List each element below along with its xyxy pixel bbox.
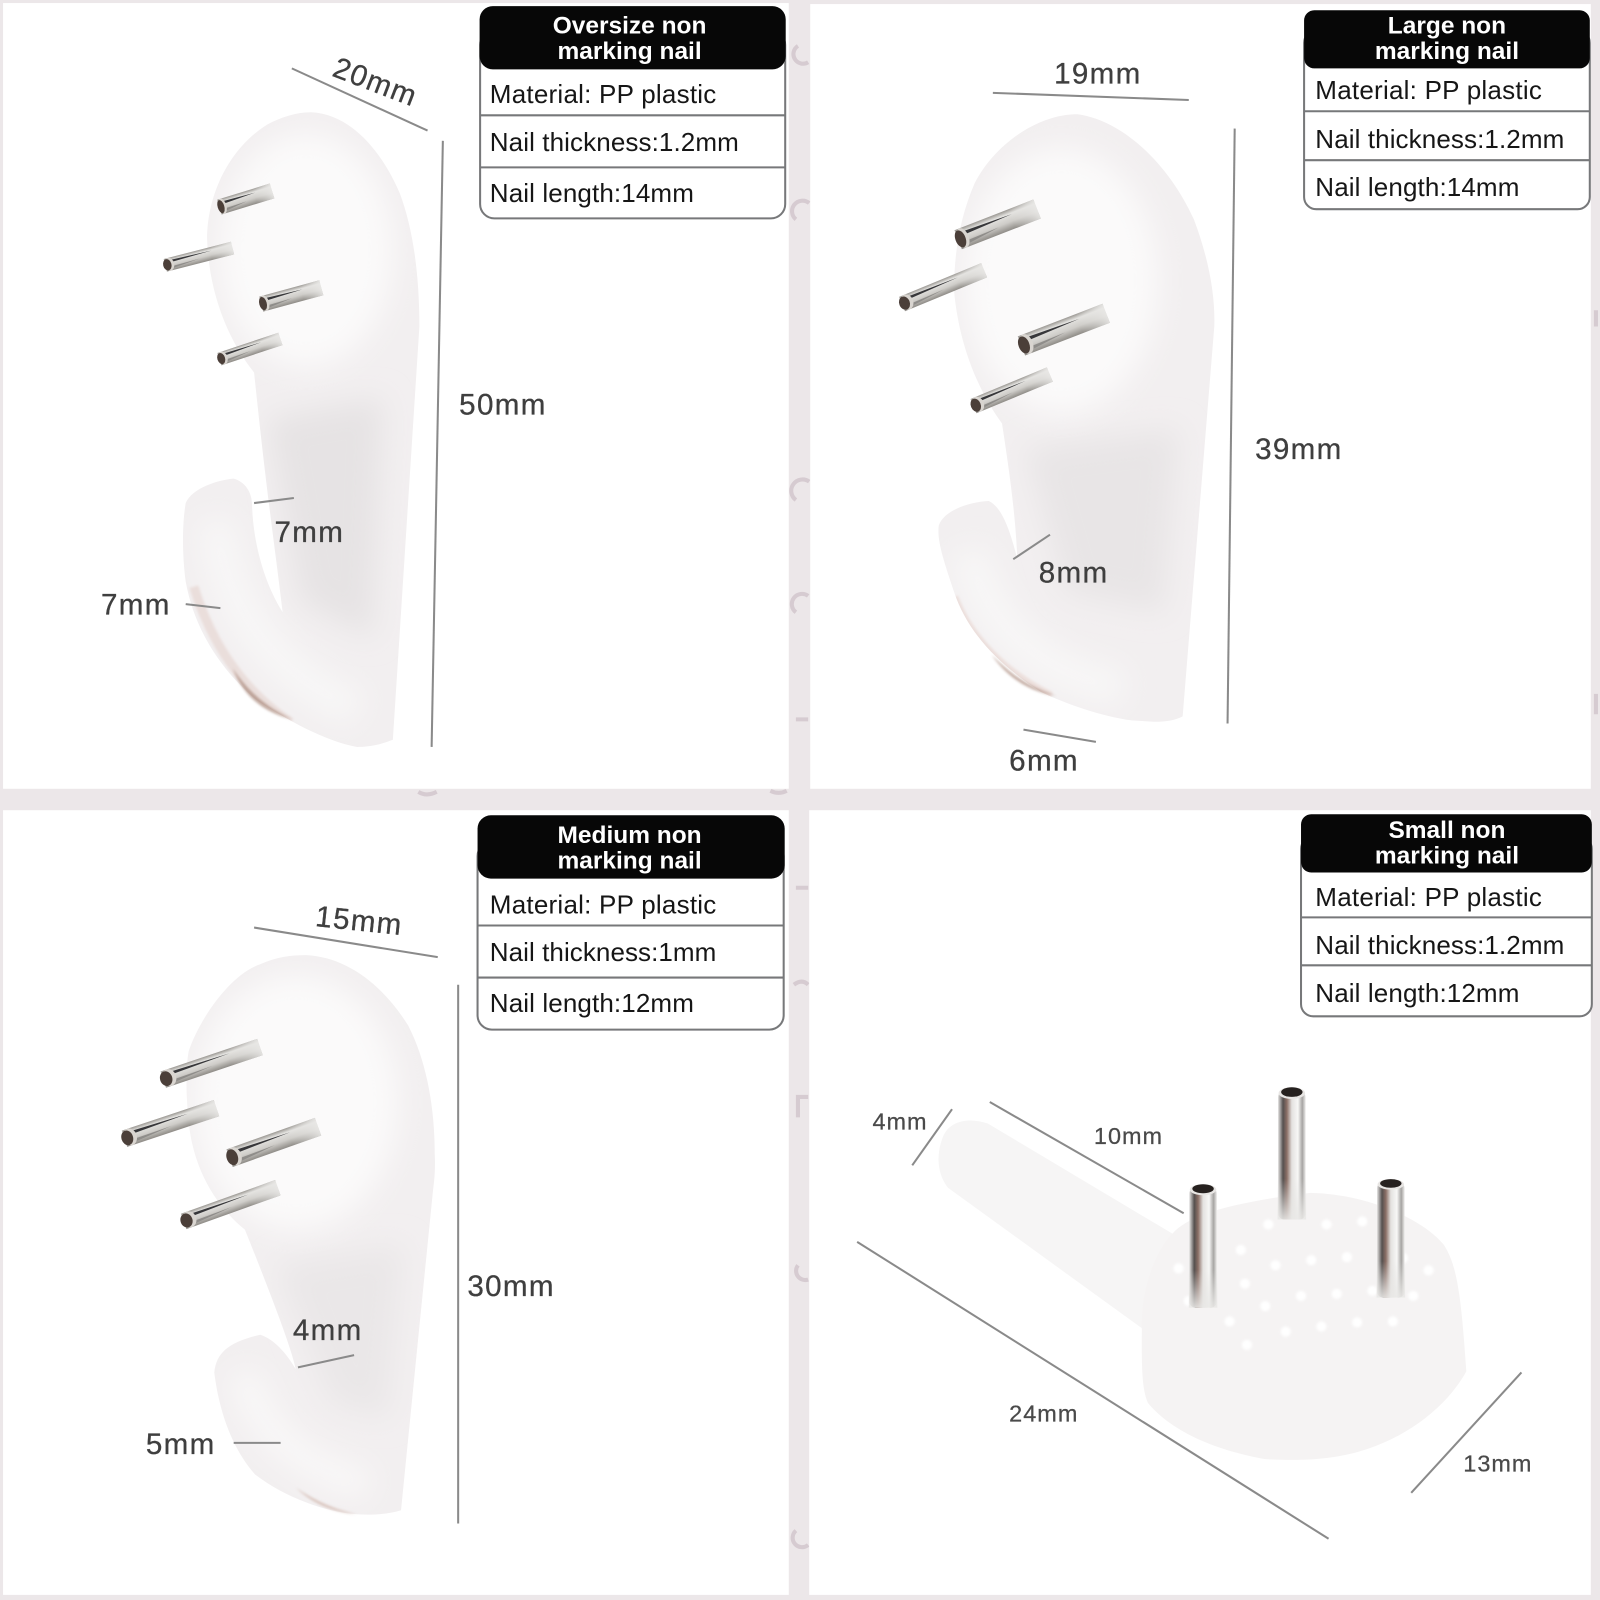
dimension: 19mm: 19mm <box>1054 58 1142 91</box>
dimension: 15mm <box>254 900 438 957</box>
spec table: small: Nail thickness:1.2mm <box>1315 930 1564 960</box>
spec table: small <box>1301 814 1592 1016</box>
large hook <box>897 114 1214 722</box>
dimension: 50mm: 50mm <box>459 388 547 421</box>
dimension: 13mm: 13mm <box>1463 1450 1533 1476</box>
spec table: small: Nail length:12mm <box>1315 978 1519 1008</box>
dimension: 24mm: 24mm <box>1009 1400 1078 1426</box>
dimension: 7mm lower: 7mm <box>101 588 171 621</box>
oversize hook <box>162 112 419 747</box>
dimension: 19mm <box>993 58 1189 100</box>
dimension: 13mm <box>1411 1372 1533 1493</box>
spec table: medium: Nail length:12mm <box>490 988 694 1018</box>
dimension: 10mm: 10mm <box>1094 1123 1163 1149</box>
dimension: 50mm <box>432 141 547 747</box>
spec table: small: Material: PP plastic <box>1315 882 1542 912</box>
spec table: medium <box>478 815 785 1030</box>
small hook <box>939 1087 1466 1460</box>
dimension: 39mm <box>1228 129 1343 723</box>
spec table: large: Nail thickness:1.2mm <box>1315 124 1564 154</box>
spec table: oversize: marking nail <box>558 38 702 65</box>
dimension: 7mm upper: 7mm <box>274 516 344 549</box>
dimension: 4mm: 4mm <box>293 1314 363 1347</box>
dimension: 10mm <box>990 1102 1184 1213</box>
spec table: medium: marking nail <box>558 847 702 874</box>
spec table: large: Large non <box>1388 13 1506 40</box>
dimension: 8mm: 8mm <box>1039 557 1108 590</box>
spec table: oversize <box>480 6 786 218</box>
spec table: oversize: Nail thickness:1.2mm <box>490 127 739 157</box>
dimension: 20mm <box>292 51 428 131</box>
spec table: large: Material: PP plastic <box>1315 75 1542 105</box>
spec table: oversize: Material: PP plastic <box>490 79 716 109</box>
panel: large nail <box>810 4 1591 789</box>
panel: small nail <box>809 810 1592 1595</box>
dimension: 20mm: 20mm <box>329 51 422 113</box>
spec table: large: marking nail <box>1375 38 1519 65</box>
dimension: 5mm <box>146 1428 281 1461</box>
dimension: 7mm upper <box>254 498 344 549</box>
dimension: 8mm <box>1013 535 1108 590</box>
spec table: large: Nail length:14mm <box>1315 172 1519 202</box>
panel: oversize nail <box>3 3 789 789</box>
spec table: oversize: Oversize non <box>553 13 706 40</box>
dimension: 15mm: 15mm <box>314 900 404 942</box>
dimension: 24mm <box>857 1242 1329 1539</box>
dot texture <box>1173 1216 1434 1350</box>
spec table: medium: Nail thickness:1mm <box>490 937 716 967</box>
spec table: small: marking nail <box>1375 842 1519 869</box>
panel: medium nail <box>3 810 789 1595</box>
medium hook <box>119 955 435 1515</box>
dimension: 6mm: 6mm <box>1009 744 1079 777</box>
spec table: medium: Medium non <box>558 822 702 849</box>
dimension: 7mm lower <box>101 588 220 621</box>
spec table: small: Small non <box>1388 817 1505 844</box>
dimension: 6mm <box>1009 730 1096 777</box>
spec table: medium: Material: PP plastic <box>490 889 716 919</box>
dimension: 39mm: 39mm <box>1255 433 1343 466</box>
spec table: oversize: Nail length:14mm <box>490 178 694 208</box>
dimension: 4mm <box>872 1109 952 1165</box>
dimension: 5mm: 5mm <box>146 1428 216 1461</box>
spec table: large <box>1304 10 1590 209</box>
dimension: 4mm <box>293 1314 363 1367</box>
dimension: 4mm: 4mm <box>872 1109 928 1135</box>
dimension: 30mm: 30mm <box>467 1270 555 1303</box>
